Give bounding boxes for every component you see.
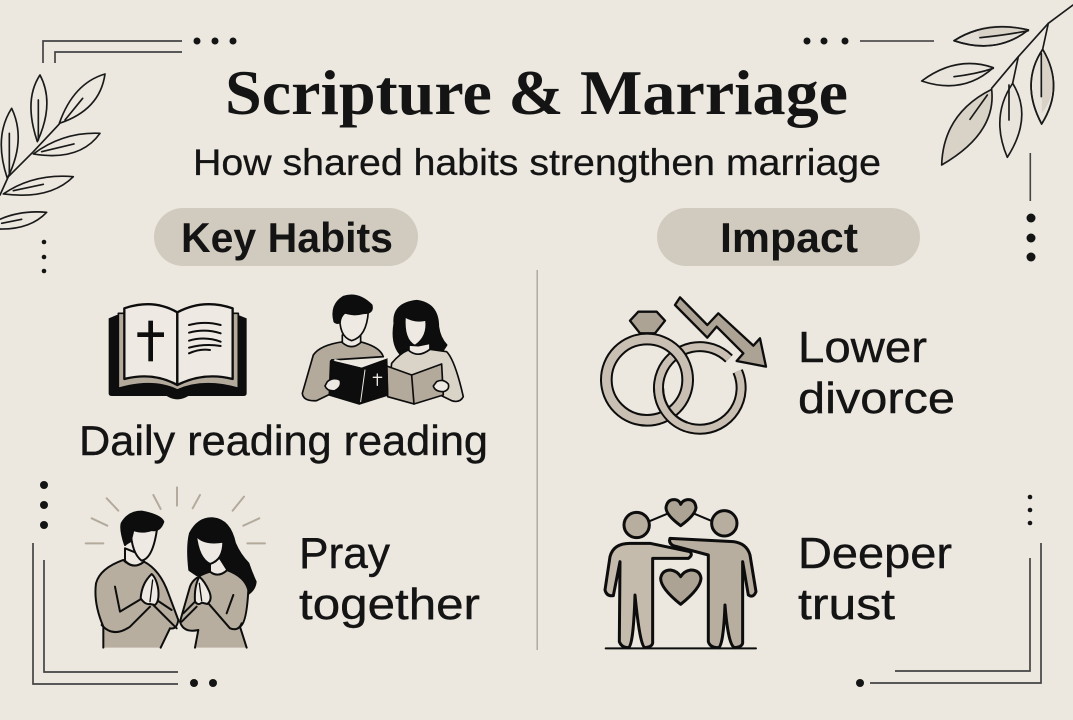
heading pill: impact [657,208,920,266]
title: Scripture & Marriage [225,57,848,128]
label: daily reading: Daily reading reading [79,417,488,464]
top-left dots [194,38,236,44]
arrow [675,297,766,367]
right side line and dots [1026,153,1036,262]
icon: open bible [109,304,247,399]
label: lower divorce: divorce [798,374,955,423]
subtitle: How shared habits strengthen marriage [193,142,881,183]
left side dots [42,240,46,273]
label: lower divorce: Lower [798,323,927,372]
top-left corner frame [43,41,182,63]
bottom-right corner frame [870,543,1041,683]
ring two overlap [659,385,688,428]
heading pill: key habits [154,208,418,266]
label: deeper trust [798,529,952,629]
diamond [630,312,665,333]
label: deeper trust: Deeper [798,529,952,578]
label: pray together: together [299,580,480,629]
label: deeper trust: trust [798,580,895,629]
bottom-right dots [856,495,1032,687]
icon: interlocked rings with falling arrow [606,297,766,429]
light rays [86,487,265,543]
label: pray together [299,529,480,629]
icon: right leaf branch [922,5,1073,165]
icon: left leaf branch [0,74,105,229]
center divider [536,270,538,650]
woman praying [180,518,256,648]
bottom-left dots [40,481,217,687]
icon: two people with hearts [605,500,756,648]
bottom-left corner frame [33,543,178,684]
label: lower divorce [798,323,955,423]
top-right dots and line [804,38,934,44]
ring one [606,339,688,420]
icon: couple reading [302,295,463,404]
man praying [95,512,178,648]
icon: couple praying [86,487,265,648]
heading pill: key habits: Key Habits [181,214,393,261]
ring two [658,347,741,429]
label: pray together: Pray [299,529,390,578]
heading pill: impact: Impact [720,214,858,261]
